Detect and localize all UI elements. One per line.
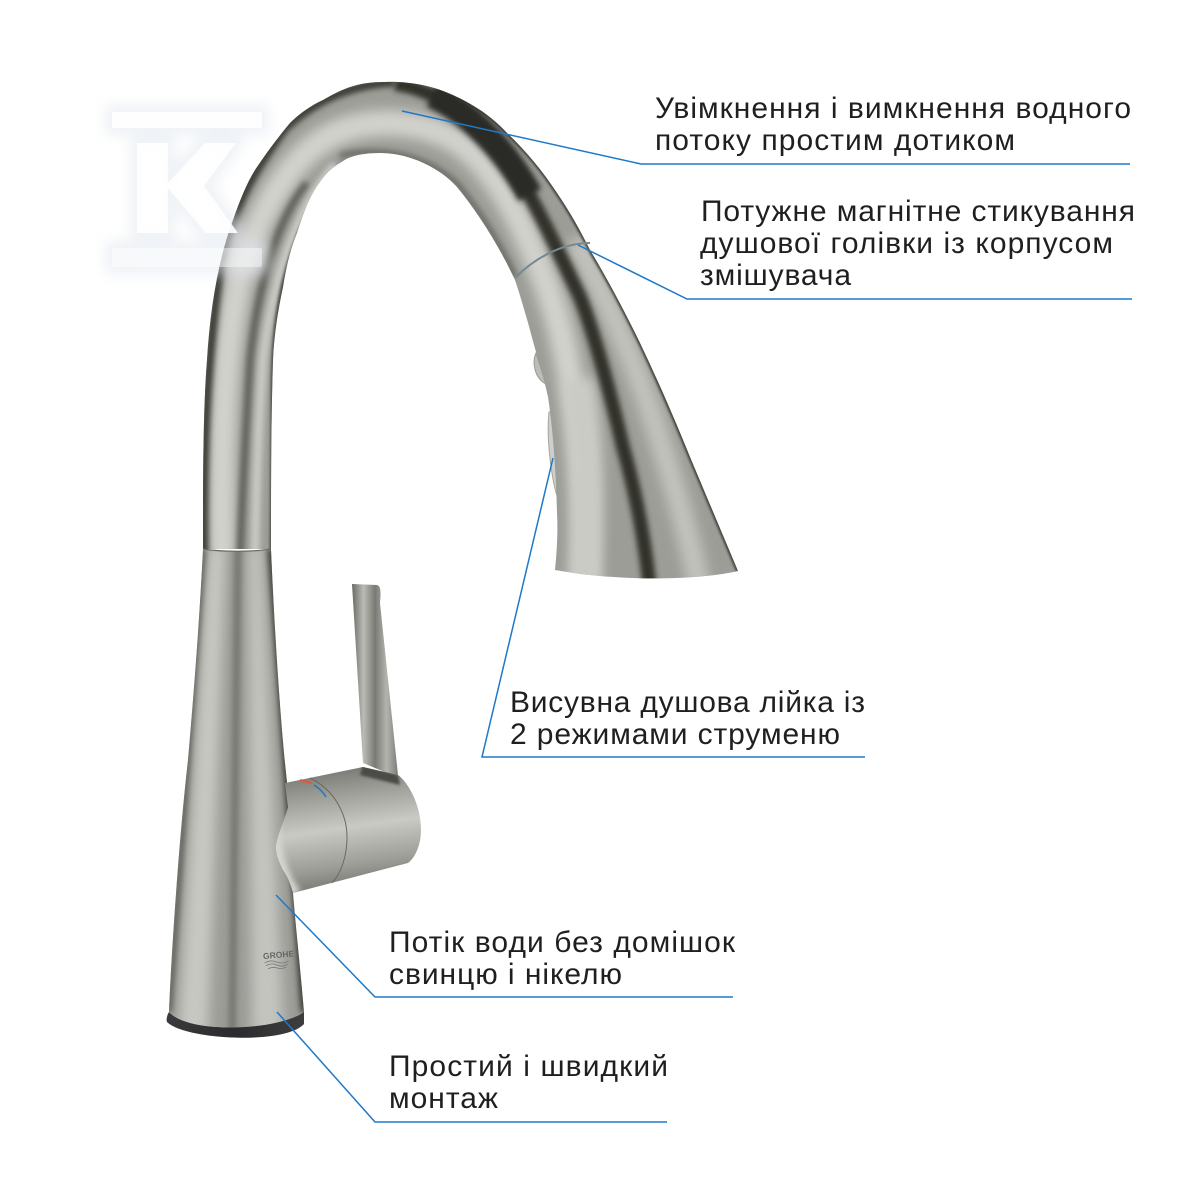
- callout 3: pull-out spray: Висувна душова лійка із: [510, 686, 865, 719]
- callout 1: touch control: потоку простим дотиком: [655, 124, 1015, 157]
- mixer cylinder: [276, 767, 421, 893]
- faucet body: [166, 548, 304, 1038]
- callout 3: pull-out spray: 2 режимами струменю: [510, 718, 840, 751]
- lever handle: [352, 584, 398, 775]
- callout 5: easy install: монтаж: [389, 1082, 498, 1115]
- callout 2: magnetic docking: змішувача: [700, 259, 851, 292]
- callout 2: magnetic docking: [578, 195, 1135, 299]
- callout 4: lead free: свинцю і нікелю: [389, 958, 622, 991]
- faucet spout and pull-out head: [190, 70, 750, 590]
- callout 1: touch control: [402, 92, 1131, 164]
- callout 5: easy install: Простий і швидкий: [389, 1050, 668, 1083]
- callout 3: pull-out spray: [482, 458, 865, 757]
- watermark logo: [112, 112, 262, 267]
- GROHE logo: GROHE: [263, 948, 295, 961]
- callout 2: magnetic docking: Потужне магнітне стикування: [701, 195, 1135, 228]
- callout 2: magnetic docking: душової голівки із корпусом: [700, 227, 1113, 260]
- callout 1: touch control: Увімкнення і вимкнення водного: [655, 92, 1131, 125]
- callout 4: lead free: Потік води без домішок: [389, 926, 736, 959]
- callout 5: easy install: [277, 1012, 668, 1122]
- faucet illustration: [160, 70, 750, 1045]
- callout 4: lead free: [276, 895, 736, 997]
- GROHE logo: [263, 948, 296, 970]
